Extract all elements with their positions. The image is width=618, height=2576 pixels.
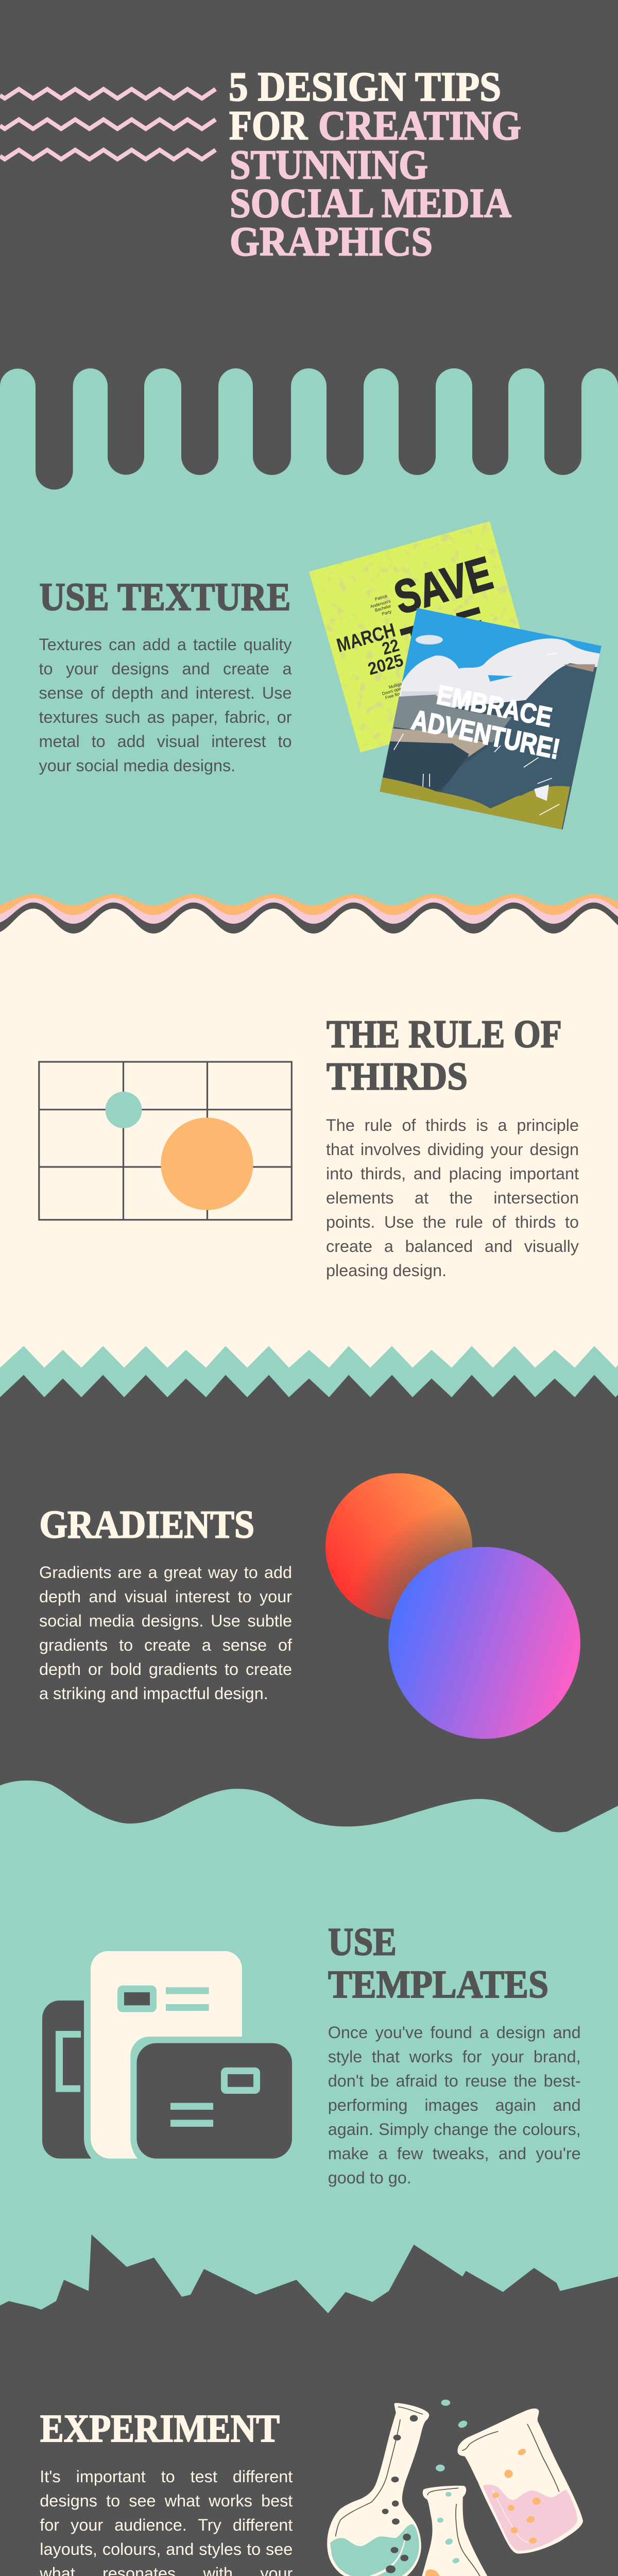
text block: use templates: don't be afraid to reuse the best- xyxy=(328,2072,581,2090)
zigzag border: teal xyxy=(0,1346,618,1443)
image: save the date yellow card: Party xyxy=(381,608,392,617)
text block: gradients: social media designs. Use subtle xyxy=(39,1612,292,1630)
title: FOR xyxy=(229,102,308,148)
heading: use templates xyxy=(328,1921,548,2006)
wave: pink stripe xyxy=(0,876,618,924)
text block: experiment: It's important to test different xyxy=(40,2467,293,2486)
panel: dripping teal background for use texture xyxy=(0,368,618,886)
heading: experiment: EXPERIMENT xyxy=(40,2407,280,2450)
text block: the rule of thirds: create a balanced and visually xyxy=(326,1237,579,1256)
image: save the date yellow card: Mulligan xyxy=(388,681,405,690)
icon: templates documents xyxy=(42,1951,292,2159)
title: STUNNING xyxy=(230,141,428,188)
illustration: gradient circles xyxy=(325,1473,580,1739)
zigzag border: dark xyxy=(0,1375,618,1443)
text block: gradients: gradients to create a sense of xyxy=(39,1636,292,1654)
heading: use texture: USE TEXTURE xyxy=(39,575,290,619)
text block: experiment xyxy=(40,2467,293,2576)
text block: use templates: Once you've found a design and xyxy=(328,2023,581,2042)
text block: gradients xyxy=(39,1563,293,1703)
heading: use templates: TEMPLATES xyxy=(328,1963,548,2006)
grid marker: orange circle xyxy=(161,1117,253,1210)
text block: use texture xyxy=(39,635,291,775)
image: embrace adventure mountain photo: ADVENTURE! xyxy=(409,704,562,765)
illustration: science flasks xyxy=(327,2400,583,2576)
grid marker: teal circle xyxy=(105,1092,142,1128)
image: embrace adventure mountain photo: EMBRACE xyxy=(434,679,555,733)
heading: gradients: GRADIENTS xyxy=(39,1503,254,1547)
flask: pink beaker xyxy=(457,2409,583,2554)
text block: the rule of thirds: pleasing design. xyxy=(326,1261,447,1280)
heading: the rule of thirds xyxy=(327,1012,562,1098)
text block: use texture: your social media designs. xyxy=(39,756,235,775)
image: save the date yellow card: 22 xyxy=(380,636,401,659)
decorative zigzag lines xyxy=(0,89,216,159)
text block: use templates: style that works for your brand, xyxy=(328,2047,581,2066)
image: save the date yellow card: SAVE xyxy=(389,546,497,624)
text block: gradients: Gradients are a great way to add xyxy=(39,1563,292,1582)
heading: the rule of thirds: THE RULE OF xyxy=(327,1012,562,1056)
wave: teal edge xyxy=(0,876,618,905)
text block: the rule of thirds: into thirds, and placing important xyxy=(326,1164,579,1183)
image: save the date yellow card xyxy=(309,521,520,752)
text block: the rule of thirds: The rule of thirds is a principle xyxy=(326,1116,579,1134)
text block: experiment: designs to see what works best xyxy=(40,2492,293,2510)
heading: the rule of thirds: THIRDS xyxy=(327,1055,468,1098)
text block: use texture: textures such as paper, fabric, or xyxy=(39,708,291,726)
text block: use texture: metal to add visual interest to xyxy=(39,732,291,751)
title: 5 DESIGN TIPS xyxy=(229,63,501,110)
image: save the date yellow card: Doors open xyxy=(382,685,404,697)
illustration: textured social media graphics xyxy=(301,516,604,830)
title xyxy=(229,63,521,265)
text block: use templates: again. Simply change the colours, xyxy=(328,2120,581,2139)
text block: use texture: to your designs and create a xyxy=(39,659,291,678)
text block: use templates: make a few tweaks, and you're xyxy=(328,2144,581,2163)
text block: use templates: good to go. xyxy=(328,2168,411,2187)
wave: dark stripe xyxy=(0,876,618,934)
image: save the date yellow card: Free flow xyxy=(385,690,403,700)
image: save the date yellow card: Anderson's xyxy=(370,598,391,609)
image: save the date yellow card: Bachelor xyxy=(374,603,392,613)
image: save the date yellow card: Patrick xyxy=(374,593,388,602)
text block: use templates: performing images again and xyxy=(328,2096,581,2114)
title: GRAPHICS xyxy=(230,218,433,265)
chart: rule of thirds grid xyxy=(39,1062,291,1220)
image: save the date yellow card: THE xyxy=(397,597,492,671)
panel: jagged dark background for experiment xyxy=(0,2234,618,2370)
text block: use texture: Textures can add a tactile quality xyxy=(39,635,291,654)
image: save the date yellow card: MARCH xyxy=(334,619,398,656)
text block: experiment: layouts, colours, and styles to see xyxy=(40,2540,293,2558)
panel: teal wavy background for use templates xyxy=(0,1781,618,2370)
title: CREATING xyxy=(318,102,521,148)
wave: orange stripe xyxy=(0,876,618,915)
text block: the rule of thirds xyxy=(326,1116,579,1280)
text block: gradients: depth and visual interest to your xyxy=(39,1587,292,1606)
text block: use templates xyxy=(328,2023,581,2187)
text block: gradients: depth or bold gradients to create xyxy=(39,1660,292,1679)
image: embrace adventure mountain photo xyxy=(376,608,604,830)
flask: round teal xyxy=(327,2403,429,2576)
bubbles: teal drops xyxy=(436,2400,468,2471)
title: SOCIAL MEDIA xyxy=(230,180,511,226)
flask: orange conical xyxy=(413,2486,503,2576)
text block: the rule of thirds: points. Use the rule of thirds to xyxy=(326,1213,579,1231)
text block: gradients: a striking and impactful design. xyxy=(39,1684,268,1703)
text block: use texture: sense of depth and interest. Use xyxy=(39,684,291,702)
heading: use templates: USE xyxy=(328,1921,397,1964)
text block: the rule of thirds: that involves dividing your design xyxy=(326,1140,579,1159)
text block: the rule of thirds: elements at the intersection xyxy=(326,1189,579,1207)
image: save the date yellow card: 2025 xyxy=(366,651,405,679)
panel: cream background for rule of thirds xyxy=(0,876,618,1401)
text block: experiment: for your audience. Try different xyxy=(40,2516,293,2534)
